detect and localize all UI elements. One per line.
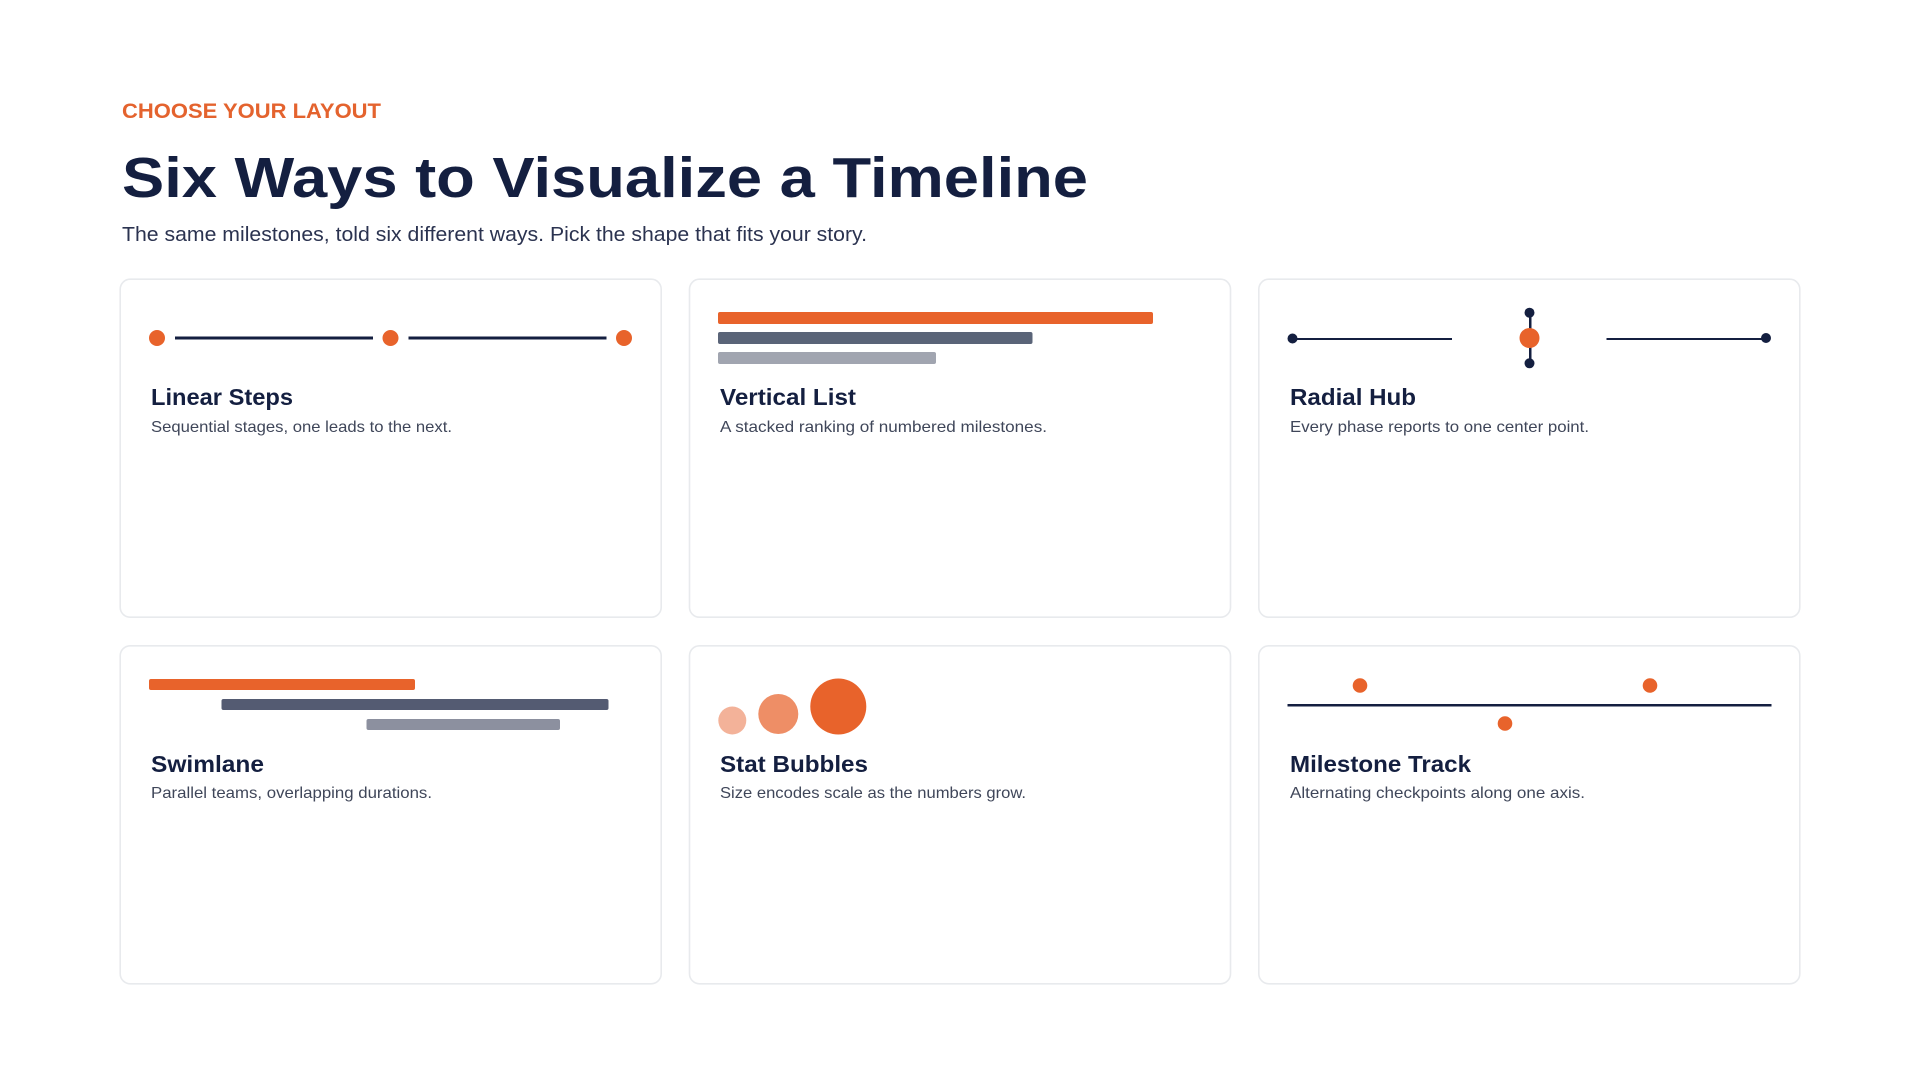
header	[122, 100, 1088, 246]
panel: vertical list	[690, 279, 1230, 617]
diagram: bubbles	[718, 678, 866, 734]
diagram: hub and spokes	[1288, 308, 1771, 368]
heading: radial hub: Radial Hub	[1290, 384, 1416, 410]
diagram: linear steps	[149, 330, 632, 346]
panel: linear steps	[120, 279, 661, 617]
heading: linear steps: Linear Steps	[151, 384, 293, 410]
panel: milestone track	[1259, 646, 1800, 984]
diagram: stacked bars	[718, 312, 1153, 364]
description: vertical list: A stacked ranking of numbered milestones.	[720, 419, 1047, 436]
panel: stat bubbles	[690, 646, 1230, 984]
subtitle: The same milestones, told six different ways. Pick the shape that fits your story.	[122, 224, 867, 246]
panel: swimlane	[120, 646, 661, 984]
heading: milestone track: Milestone Track	[1290, 751, 1471, 777]
heading: swimlane: Swimlane	[151, 751, 264, 777]
description: swimlane: Parallel teams, overlapping durations.	[151, 785, 432, 802]
eyebrow label: CHOOSE YOUR LAYOUT	[122, 100, 381, 123]
title: Six Ways to Visualize a Timeline	[122, 146, 1088, 210]
diagram: track	[1288, 678, 1772, 731]
heading: vertical list: Vertical List	[720, 384, 856, 410]
panel: radial hub	[1259, 279, 1800, 617]
description: milestone track: Alternating checkpoints along one axis.	[1290, 785, 1585, 802]
description: radial hub: Every phase reports to one center point.	[1290, 419, 1589, 436]
description: stat bubbles: Size encodes scale as the numbers grow.	[720, 785, 1026, 802]
diagram: swimlane bars	[149, 679, 608, 730]
description: linear steps: Sequential stages, one leads to the next.	[151, 419, 452, 436]
heading: stat bubbles: Stat Bubbles	[720, 751, 868, 777]
